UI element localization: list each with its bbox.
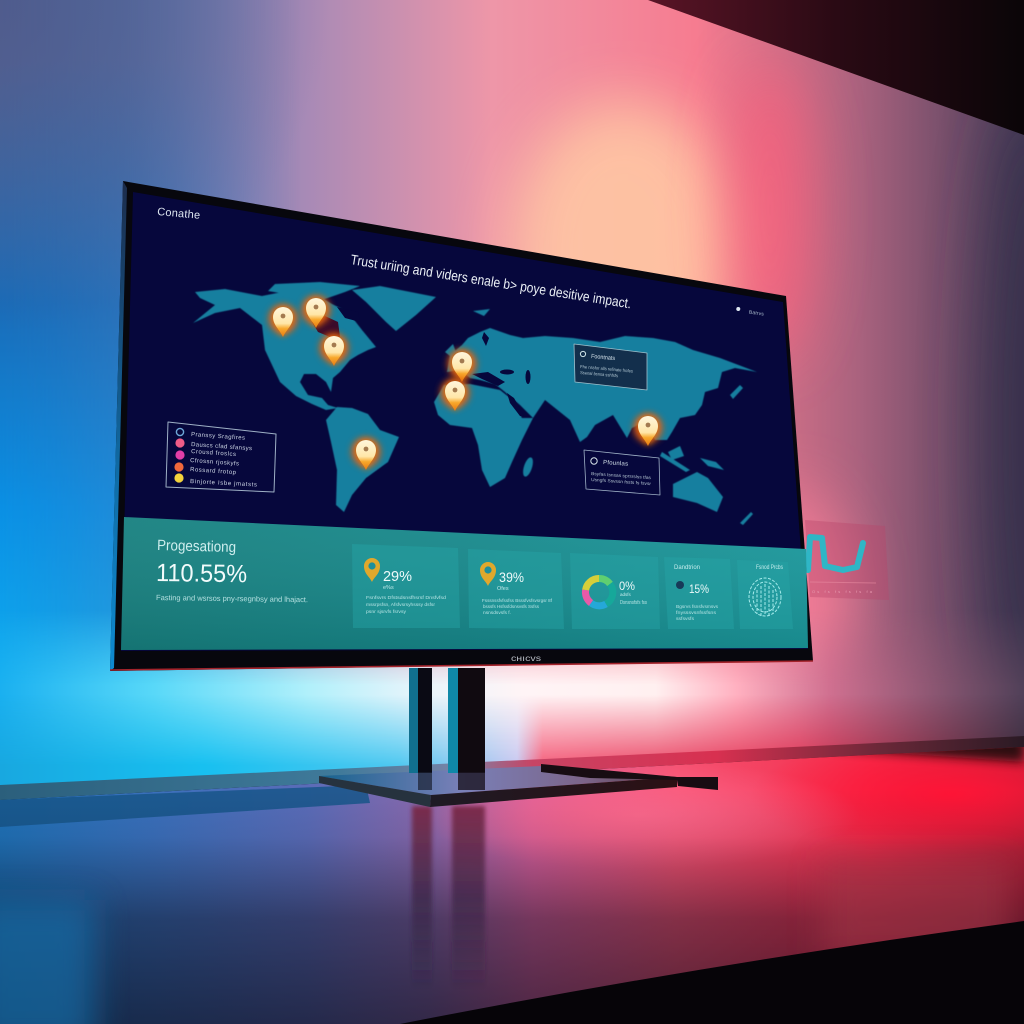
donut card: adsfs bbox=[620, 592, 632, 597]
skirting ledge bbox=[0, 736, 1024, 800]
wall background with coloured light bbox=[0, 0, 1024, 800]
stat card 2: 39% bbox=[499, 569, 524, 585]
canadian arctic bbox=[268, 282, 360, 300]
stat card 2: nsnsdsvsfs f. bbox=[483, 610, 511, 615]
callout: asia bbox=[574, 344, 647, 390]
pin: eastern usa bbox=[319, 333, 349, 366]
headline metric: 110.55% bbox=[156, 559, 247, 588]
stat card 4: 15% bbox=[689, 582, 709, 596]
top right status label: Batrvs bbox=[748, 310, 765, 318]
legend labels: Pranssy Sragfires bbox=[191, 432, 245, 442]
stat card 4: Bgsrvs fsnsfvsmsvs bbox=[676, 604, 719, 609]
new guinea bbox=[700, 458, 724, 470]
callout: oceania: Usngfs Ssvssn fssts fs fsvsr bbox=[591, 477, 652, 486]
africa bbox=[434, 384, 533, 487]
callout: oceania bbox=[584, 450, 660, 495]
legend labels: Rossard frotop bbox=[190, 467, 237, 476]
monitor frame bbox=[110, 181, 813, 671]
donut card bbox=[570, 553, 660, 629]
iceland bbox=[473, 309, 490, 316]
headline metric: Progesationg bbox=[157, 537, 236, 556]
callout: asia: Foontnats bbox=[591, 354, 615, 362]
legend labels: Cfrossn rjoskyfs bbox=[190, 458, 239, 467]
map title: Trust uriing and viders enale b> poye desitive impact. bbox=[350, 251, 633, 311]
stat card 2: Ofes bbox=[497, 586, 509, 592]
stand posts bbox=[409, 668, 485, 790]
donut card: Dsnsnsfsfs fss bbox=[620, 600, 647, 606]
stat card 1: psnr sjsrvfs fsrvsy bbox=[366, 609, 407, 614]
pin: brazil bbox=[351, 437, 381, 470]
floating ghost chart card bbox=[805, 520, 889, 600]
stat card 1: mssrpsfsn, Afsfvsrsyhsssy dsfsr bbox=[366, 602, 436, 607]
fingerprint card: Fsnod Prcbs bbox=[756, 565, 783, 571]
legend labels: Dauscs cfad sfansys bbox=[191, 442, 252, 452]
madagascar bbox=[521, 456, 535, 478]
bezel brand mark: cнıcvs bbox=[511, 654, 541, 663]
monitor stand bbox=[319, 668, 718, 807]
pin: spain bbox=[447, 349, 477, 382]
legend box bbox=[166, 422, 276, 492]
pin: western canada bbox=[268, 304, 298, 337]
stat card 2: bsssfs Hsfssfdsnsvsfs Ssfss bbox=[483, 604, 540, 609]
bottom stats panel bbox=[121, 517, 808, 650]
stat card 4 bbox=[664, 557, 734, 629]
inland seas and hudson bay bbox=[312, 307, 530, 416]
eurasia bbox=[447, 328, 757, 442]
japan bbox=[730, 385, 743, 399]
fingerprint card bbox=[737, 560, 793, 629]
stat card 2: Fsssnssfvfssfss Bsssfvsfsvsrgsr 8f bbox=[482, 598, 553, 603]
screen background bbox=[121, 192, 808, 651]
stat card 1: 29% bbox=[383, 568, 412, 585]
callout: asia: Fhe nssfor alls refinate frofes bbox=[580, 364, 634, 374]
australia bbox=[673, 472, 723, 512]
fingerprint graphic bbox=[749, 578, 781, 616]
dark foreground table edge bbox=[400, 921, 1024, 1024]
stat card 4: fnysssvsnfssfsns bbox=[676, 610, 717, 615]
pin: south-east asia bbox=[633, 413, 663, 446]
dark ceiling wedge bbox=[648, 0, 1024, 135]
callout: asia: Ssenal bsnsa sshfsfs bbox=[580, 370, 619, 378]
callout: oceania: Bsyfas tsnsas sprsrslss tfas bbox=[591, 471, 652, 480]
world map bbox=[193, 282, 757, 525]
stand foot bar bbox=[541, 764, 718, 790]
legend labels: Binjorte Isbe jmatsts bbox=[190, 479, 257, 489]
legend icons bbox=[174, 428, 185, 483]
north america bbox=[193, 289, 376, 410]
stat card 2 bbox=[468, 549, 564, 629]
donut card: 0% bbox=[619, 579, 635, 593]
indonesia islands bbox=[660, 452, 690, 472]
british isles bbox=[445, 344, 456, 356]
legend labels: Crousd froslcs bbox=[191, 449, 236, 458]
callout: oceania: Pfounlas bbox=[603, 460, 628, 468]
floor surface bbox=[0, 730, 1024, 1024]
new zealand bbox=[740, 512, 753, 525]
stand base plate bbox=[319, 766, 677, 807]
brand heading: Conathe bbox=[157, 206, 201, 222]
stat card 4: ssfsvsfs bbox=[676, 616, 695, 621]
stat card 4: Dandtrion bbox=[674, 565, 700, 571]
headline metric: Fasting and wsrsos pny-rsegnbsy and lhajact. bbox=[156, 593, 308, 604]
stat card 1: Fsnfsvrs Dfstsdsnsfhsrsf Dnsfvfsd bbox=[366, 595, 447, 600]
borneo bbox=[668, 446, 684, 460]
south america bbox=[326, 407, 399, 512]
stat card 1 bbox=[352, 544, 460, 628]
top right status label bbox=[736, 307, 765, 318]
stand reflection bbox=[412, 806, 485, 990]
donut chart bbox=[585, 578, 613, 606]
floating ghost chart card: Os fs fs fs fs fa bbox=[812, 589, 873, 594]
pin: north africa bbox=[440, 378, 470, 411]
map pins bbox=[268, 295, 663, 470]
greenland bbox=[352, 286, 436, 331]
headline metric bbox=[156, 537, 308, 604]
stat card 1: e%s bbox=[383, 585, 394, 591]
pin: central canada bbox=[301, 295, 331, 328]
legend labels bbox=[190, 432, 257, 489]
